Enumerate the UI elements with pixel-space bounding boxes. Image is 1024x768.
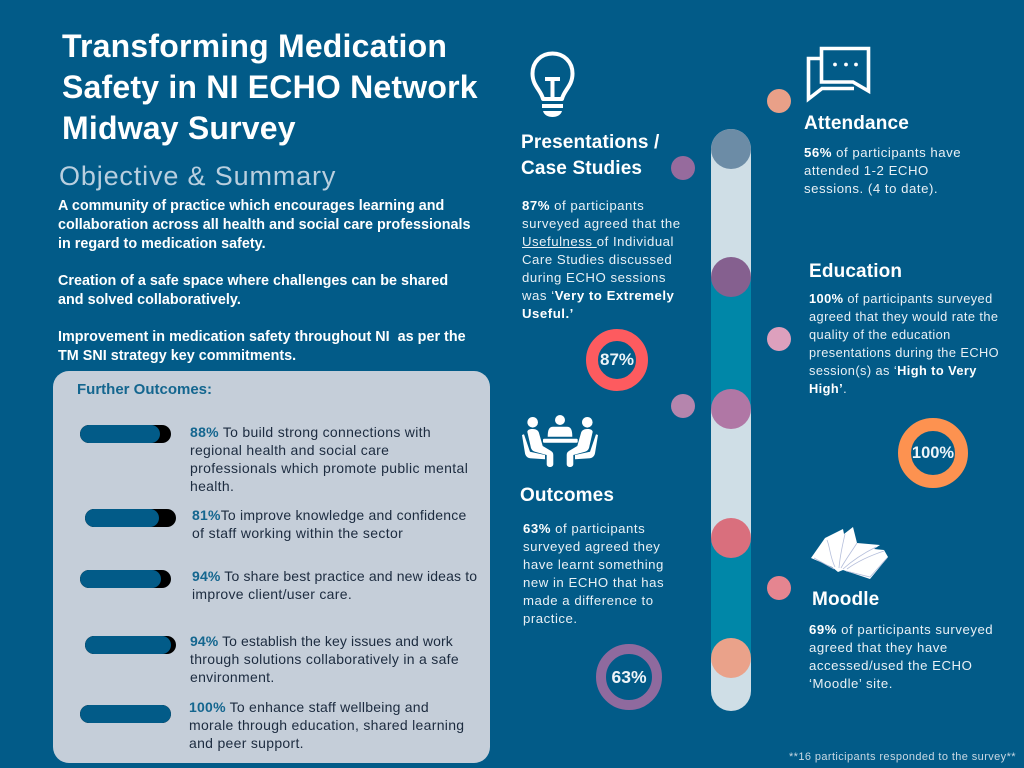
icon: light bulb [530, 52, 574, 117]
text: education: agreed that they would rate the [809, 309, 998, 324]
heading: further outcomes: Further Outcomes: [77, 381, 212, 398]
text: moodle: ‘Moodle’ site. [809, 676, 893, 691]
heading: moodle: Moodle [812, 589, 879, 610]
title [62, 28, 478, 146]
timeline segment: upper teal [711, 277, 751, 409]
dot: outcomes [671, 394, 695, 418]
dot: education [767, 327, 791, 351]
progress bar: 81% [85, 509, 176, 527]
text: presentations: Care Studies discussed [522, 252, 672, 267]
text block: summary: and solved collaboratively. [58, 292, 241, 308]
text: outcomes: surveyed agreed they [523, 539, 660, 554]
outcome text: 100%: and peer support. [189, 735, 304, 751]
text: presentations [522, 198, 681, 321]
text block: summary: collaboration across all health and social care professionals [58, 217, 471, 233]
text: presentations: surveyed agreed that the [522, 216, 681, 231]
title: Midway Survey [62, 110, 296, 146]
timeline node 4 [711, 518, 751, 558]
outcome text: 81%: of staff working within the sector [192, 525, 403, 541]
text: moodle: accessed/used the ECHO [809, 658, 972, 673]
outcome text: 94% share [192, 568, 477, 602]
text: presentations: Useful.’ [522, 306, 574, 321]
dot: moodle [767, 576, 791, 600]
heading: presentations [521, 132, 660, 179]
outcome text: 94% share: 94% To share best practice and new ideas to [192, 568, 477, 584]
text: outcomes: 63% of participants [523, 521, 645, 536]
footnote: **16 participants responded to the survey** [789, 751, 1016, 763]
outcome text: 88%: regional health and social care [190, 442, 389, 458]
ring: 63% [596, 644, 662, 710]
text: attendance [804, 145, 961, 196]
panel: further outcomes [53, 371, 490, 763]
icon: meeting [522, 415, 598, 467]
text: outcomes [523, 521, 664, 626]
outcome text: 88%: health. [190, 478, 234, 494]
text: education: quality of the education [809, 327, 951, 342]
timeline segment: lower teal [711, 538, 751, 658]
text: outcomes: made a difference to [523, 593, 654, 608]
timeline [711, 129, 751, 711]
text block: summary [58, 198, 471, 364]
timeline node 3 [711, 389, 751, 429]
ring: 63%: 63% [611, 666, 647, 686]
text: presentations: Usefulness of Individual [522, 234, 674, 249]
text: education: session(s) as ‘High to Very [809, 363, 977, 378]
outcome text: 94% establish: 94% To establish the key issues and work [190, 633, 453, 649]
outcome text: 100% [189, 699, 464, 751]
ring: 100%: 100% [912, 444, 954, 462]
icon: speech bubbles [806, 46, 870, 103]
text block: summary: in regard to medication safety. [58, 236, 266, 252]
text block: summary: Creation of a safe space where challenges can be shared [58, 273, 448, 289]
heading: outcomes: Outcomes [520, 485, 614, 506]
outcome text: 94% share: improve client/user care. [192, 586, 352, 602]
text: education: presentations during the ECHO [809, 345, 999, 360]
text block: summary: A community of practice which encourages learning and [58, 198, 444, 214]
timeline node 2 [711, 257, 751, 297]
timeline node 1 [711, 129, 751, 169]
title: Transforming Medication [62, 28, 447, 64]
text: presentations: during ECHO sessions [522, 270, 666, 285]
outcome text: 94% establish [190, 633, 459, 685]
text: outcomes: have learnt something [523, 557, 664, 572]
progress bar: 94% [80, 570, 171, 588]
outcome text: 94% establish: environment. [190, 669, 275, 685]
text: attendance: sessions. (4 to date). [804, 181, 938, 196]
text: education [809, 291, 999, 396]
text: moodle: agreed that they have [809, 640, 948, 655]
text: education: 100% of participants surveyed [809, 291, 993, 306]
outcome text: 100%: morale through education, shared learning [189, 717, 464, 733]
text: education: High’. [809, 381, 847, 396]
outcome text: 81%: 81%To improve knowledge and confidence [192, 507, 467, 523]
ring: 100% [898, 418, 968, 488]
outcome text: 88%: 88% To build strong connections with [190, 424, 431, 440]
progress bar: 88% [80, 425, 171, 443]
text: moodle: 69% of participants surveyed [809, 622, 993, 637]
text block: summary: TM SNI strategy key commitments. [58, 348, 296, 364]
text: attendance: attended 1-2 ECHO [804, 163, 929, 178]
progress bar: 100% [80, 705, 171, 723]
timeline node 5 [711, 638, 751, 678]
outcome text: 88%: professionals which promote public mental [190, 460, 468, 476]
heading: presentations: Case Studies [521, 158, 642, 179]
text: presentations: 87% of participants [522, 198, 644, 213]
text: moodle [809, 622, 993, 691]
ring: 87% [586, 329, 648, 391]
outcome text: 81% [192, 507, 467, 541]
outcome text: 88% [190, 424, 468, 494]
heading: presentations: Presentations / [521, 132, 659, 153]
heading: attendance: Attendance [804, 113, 909, 134]
icon: open book [811, 527, 888, 579]
text: outcomes: practice. [523, 611, 578, 626]
outcome text: 94% establish: through solutions collaboratively in a safe [190, 651, 459, 667]
heading: objective and summary: Objective & Summary [59, 161, 336, 191]
heading: education: Education [809, 261, 902, 282]
dot: presentations [671, 156, 695, 180]
text: presentations: was ‘Very to Extremely [522, 288, 674, 303]
text block: summary: Improvement in medication safety throughout NI as per the [58, 329, 466, 345]
title: Safety in NI ECHO Network [62, 69, 478, 105]
outcome text: 100%: 100% To enhance staff wellbeing and [189, 699, 429, 715]
ring: 87%: 87% [600, 350, 634, 369]
dot: attendance [767, 89, 791, 113]
text: attendance: 56% of participants have [804, 145, 961, 160]
progress bar: 94% second [85, 636, 176, 654]
text: outcomes: new in ECHO that has [523, 575, 664, 590]
